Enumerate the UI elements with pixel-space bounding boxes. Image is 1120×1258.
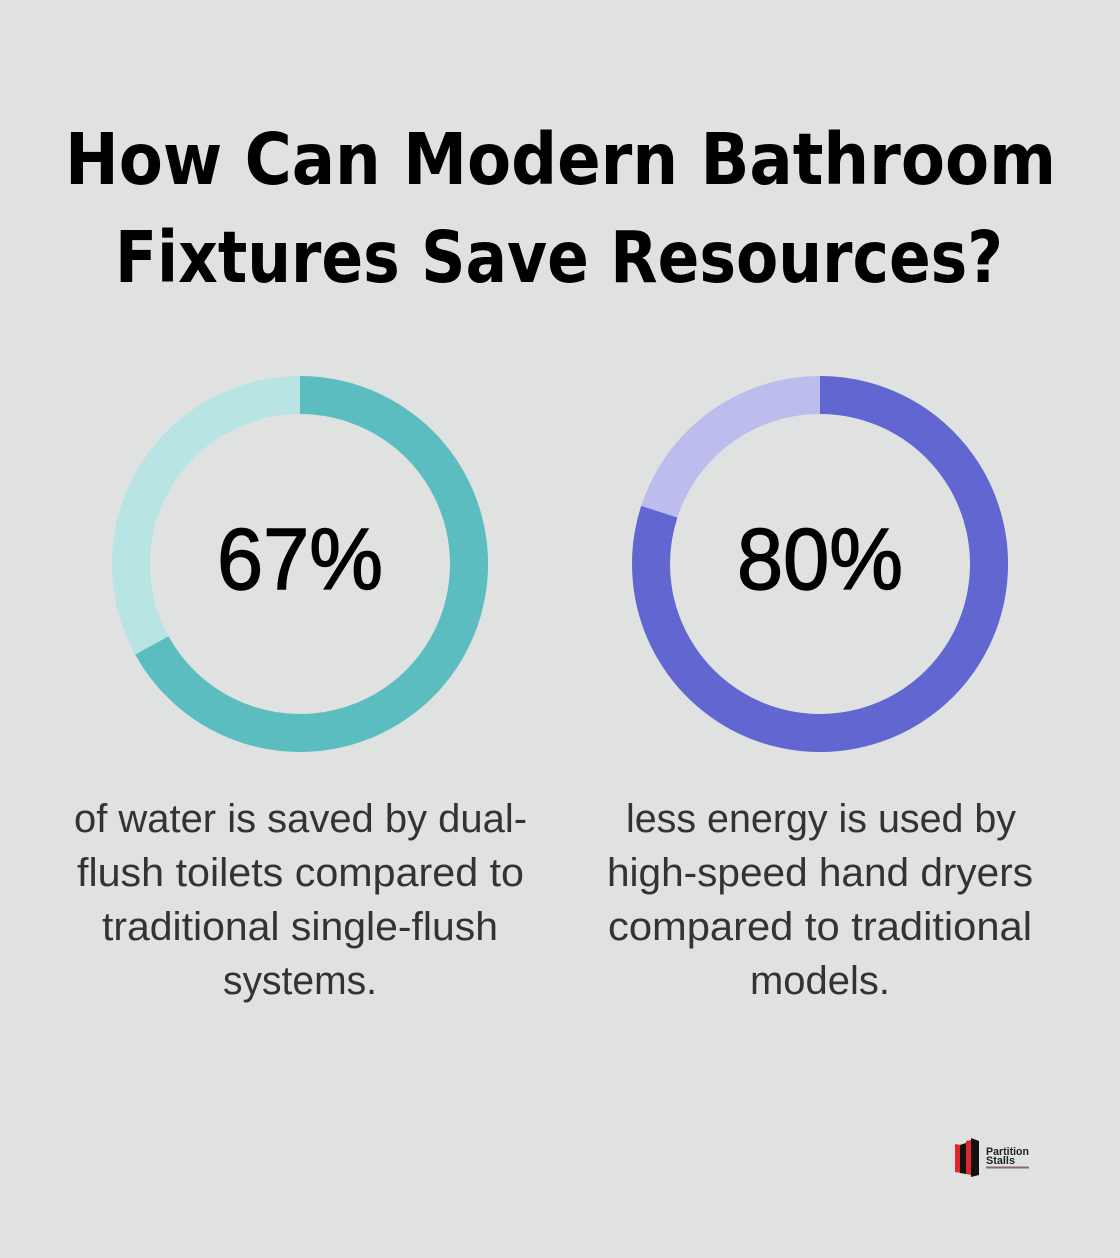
panel: high-speed hand dryers statistic: [607, 395, 1033, 1003]
description: water saving: systems.: [223, 959, 377, 1003]
donut chart: 80%: [651, 395, 989, 733]
description: water saving: of water is saved by dual-: [74, 797, 527, 841]
description: water saving: [74, 797, 527, 1003]
description: energy saving: [607, 797, 1033, 1003]
logo wordmark: Partition: [986, 1146, 1029, 1158]
logo wordmark: Stalls: [986, 1155, 1015, 1167]
description: energy saving: high-speed hand dryers: [607, 851, 1033, 895]
title: [65, 118, 1056, 299]
statistic: 80%: 80%: [737, 511, 903, 608]
panel: dual-flush toilets statistic: [74, 395, 527, 1003]
description: energy saving: models.: [750, 959, 890, 1003]
description: water saving: flush toilets compared to: [77, 851, 524, 895]
donut chart: 67%: [131, 395, 469, 733]
statistic: 67%: 67%: [217, 511, 383, 608]
description: water saving: traditional single-flush: [102, 905, 498, 949]
logo wordmark: [986, 1146, 1029, 1167]
description: energy saving: less energy is used by: [626, 797, 1016, 841]
title: Fixtures Save Resources?: [115, 216, 1003, 299]
description: energy saving: compared to traditional: [608, 905, 1032, 949]
logo: Partition Stalls: [955, 1138, 1029, 1177]
icon: partition bars: [955, 1138, 979, 1177]
